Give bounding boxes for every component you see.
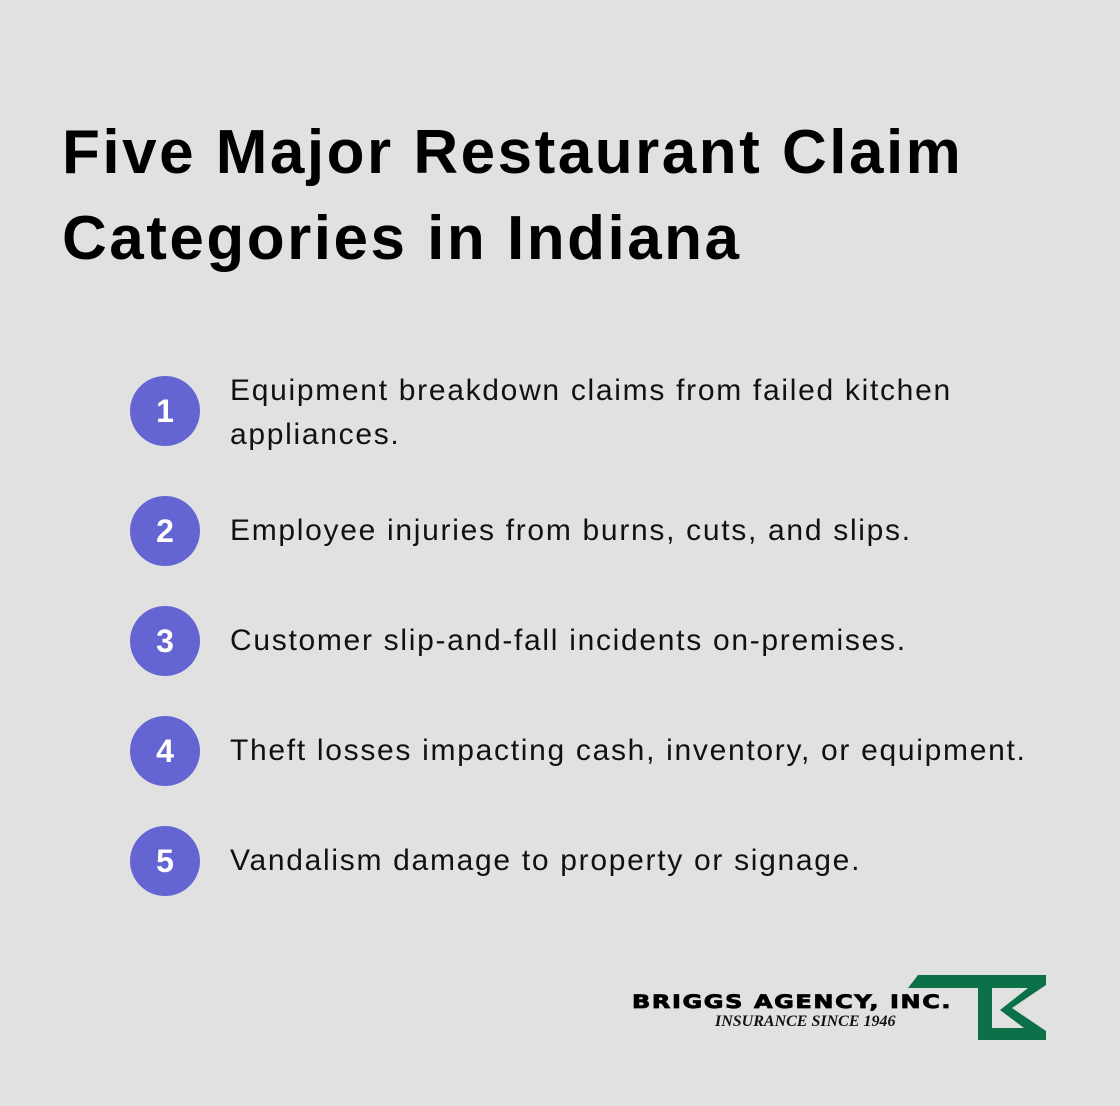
item 2: Employee injuries from burns, cuts, and slips. <box>230 514 912 547</box>
item 1 <box>130 374 952 451</box>
item 5: Vandalism damage to property or signage. <box>230 844 861 877</box>
item 3: Customer slip-and-fall incidents on-premises. <box>230 624 907 657</box>
item 5: 5 <box>156 843 174 879</box>
title <box>62 118 963 273</box>
item 3 <box>130 606 907 676</box>
item 1: appliances. <box>230 418 400 451</box>
logo <box>632 975 1046 1040</box>
title: Five Major Restaurant Claim <box>62 118 963 187</box>
item 1: Equipment breakdown claims from failed kitchen <box>230 374 952 407</box>
tagline: INSURANCE SINCE 1946 <box>715 1013 896 1030</box>
item 4: 4 <box>156 733 174 769</box>
title: Categories in Indiana <box>62 204 742 273</box>
item 2: 2 <box>156 513 174 549</box>
item 4: Theft losses impacting cash, inventory, or equipment. <box>230 734 1027 767</box>
item 2 <box>130 496 912 566</box>
item 1: 1 <box>156 393 174 429</box>
logo mark <box>908 975 1046 1040</box>
item 3: 3 <box>156 623 174 659</box>
logo text: BRIGGS AGENCY, INC. <box>632 991 952 1013</box>
item 4 <box>130 716 1027 786</box>
item 5 <box>130 826 861 896</box>
